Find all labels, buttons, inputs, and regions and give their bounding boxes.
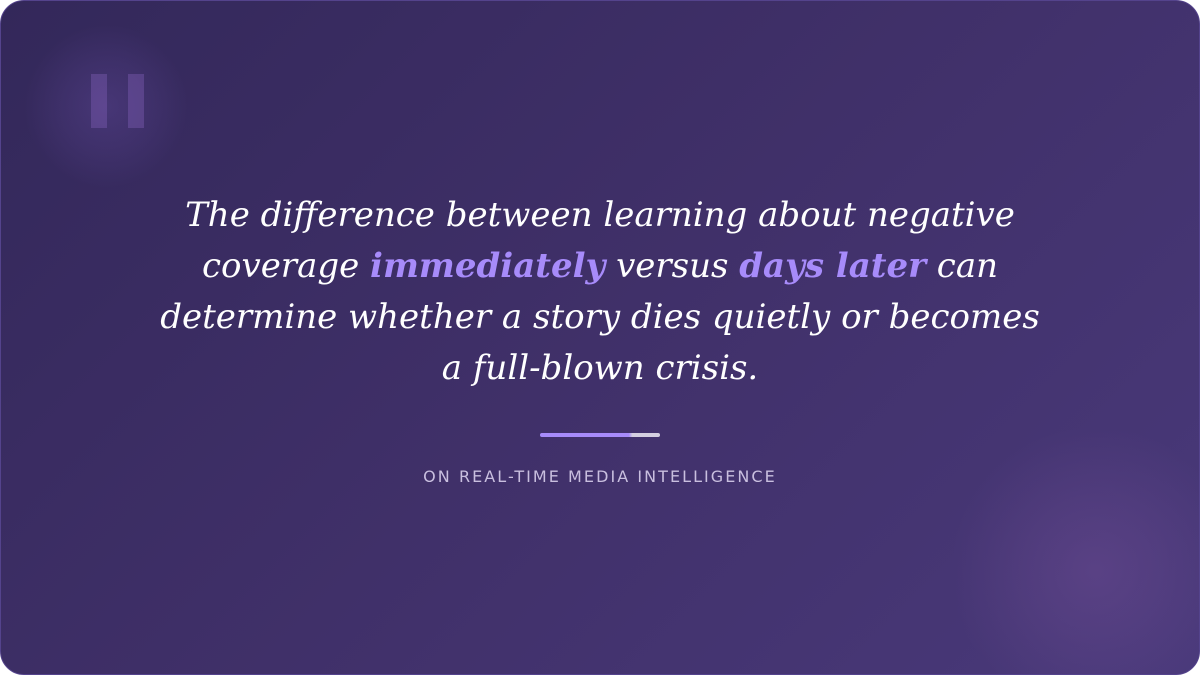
icon: pause symbol with glow	[16, 16, 196, 196]
quote text: a full-blown crisis.	[442, 348, 758, 388]
accent divider	[540, 433, 660, 437]
quote text	[160, 195, 1040, 388]
decorative glow bottom right	[860, 340, 1200, 675]
quote text: The difference between learning about negative	[185, 195, 1015, 235]
attribution label: ON REAL-TIME MEDIA INTELLIGENCE	[423, 467, 777, 486]
quote text: determine whether a story dies quietly or becomes	[160, 297, 1040, 337]
quote text: coverage immediately versus days later can	[202, 246, 998, 286]
